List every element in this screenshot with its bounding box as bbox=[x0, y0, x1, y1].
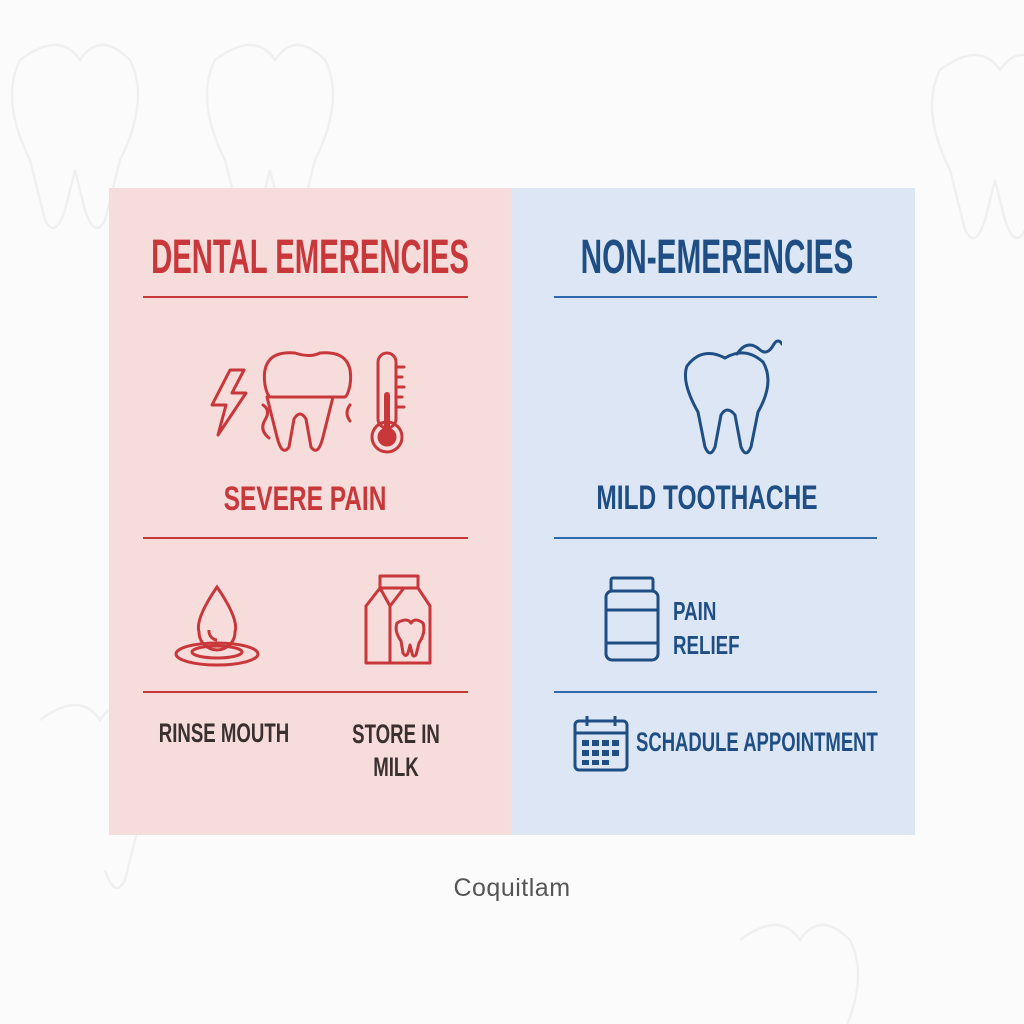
icon: tooth with floss bbox=[684, 340, 782, 454]
label: store in milk: MILK bbox=[373, 752, 419, 782]
label: pain relief bbox=[673, 596, 740, 660]
icon: pill jar bbox=[604, 576, 660, 662]
label: pain relief: PAIN bbox=[673, 596, 716, 626]
icon: water drop bbox=[174, 584, 260, 666]
panel: dental emergencies bbox=[109, 188, 511, 835]
label: severe pain: SEVERE PAIN bbox=[224, 480, 386, 518]
label: store in milk bbox=[352, 719, 440, 782]
label: mild toothache: MILD TOOTHACHE bbox=[596, 479, 818, 517]
label: schedule appointment: SCHADULE APPOINTMENT bbox=[636, 727, 878, 757]
label: pain relief: RELIEF bbox=[673, 630, 740, 660]
icon group: severe pain bbox=[210, 351, 406, 454]
label: rinse mouth: RINSE MOUTH bbox=[159, 718, 289, 748]
footer: Coquitlam: Coquitlam bbox=[453, 874, 571, 902]
heading: non-emergencies: NON-EMERENCIES bbox=[581, 231, 853, 284]
heading: dental emergencies: DENTAL EMERENCIES bbox=[151, 231, 469, 284]
panel: non-emergencies bbox=[511, 188, 915, 835]
label: store in milk: STORE IN bbox=[352, 719, 440, 749]
icon: milk carton bbox=[364, 574, 432, 664]
icon: calendar bbox=[574, 716, 628, 772]
